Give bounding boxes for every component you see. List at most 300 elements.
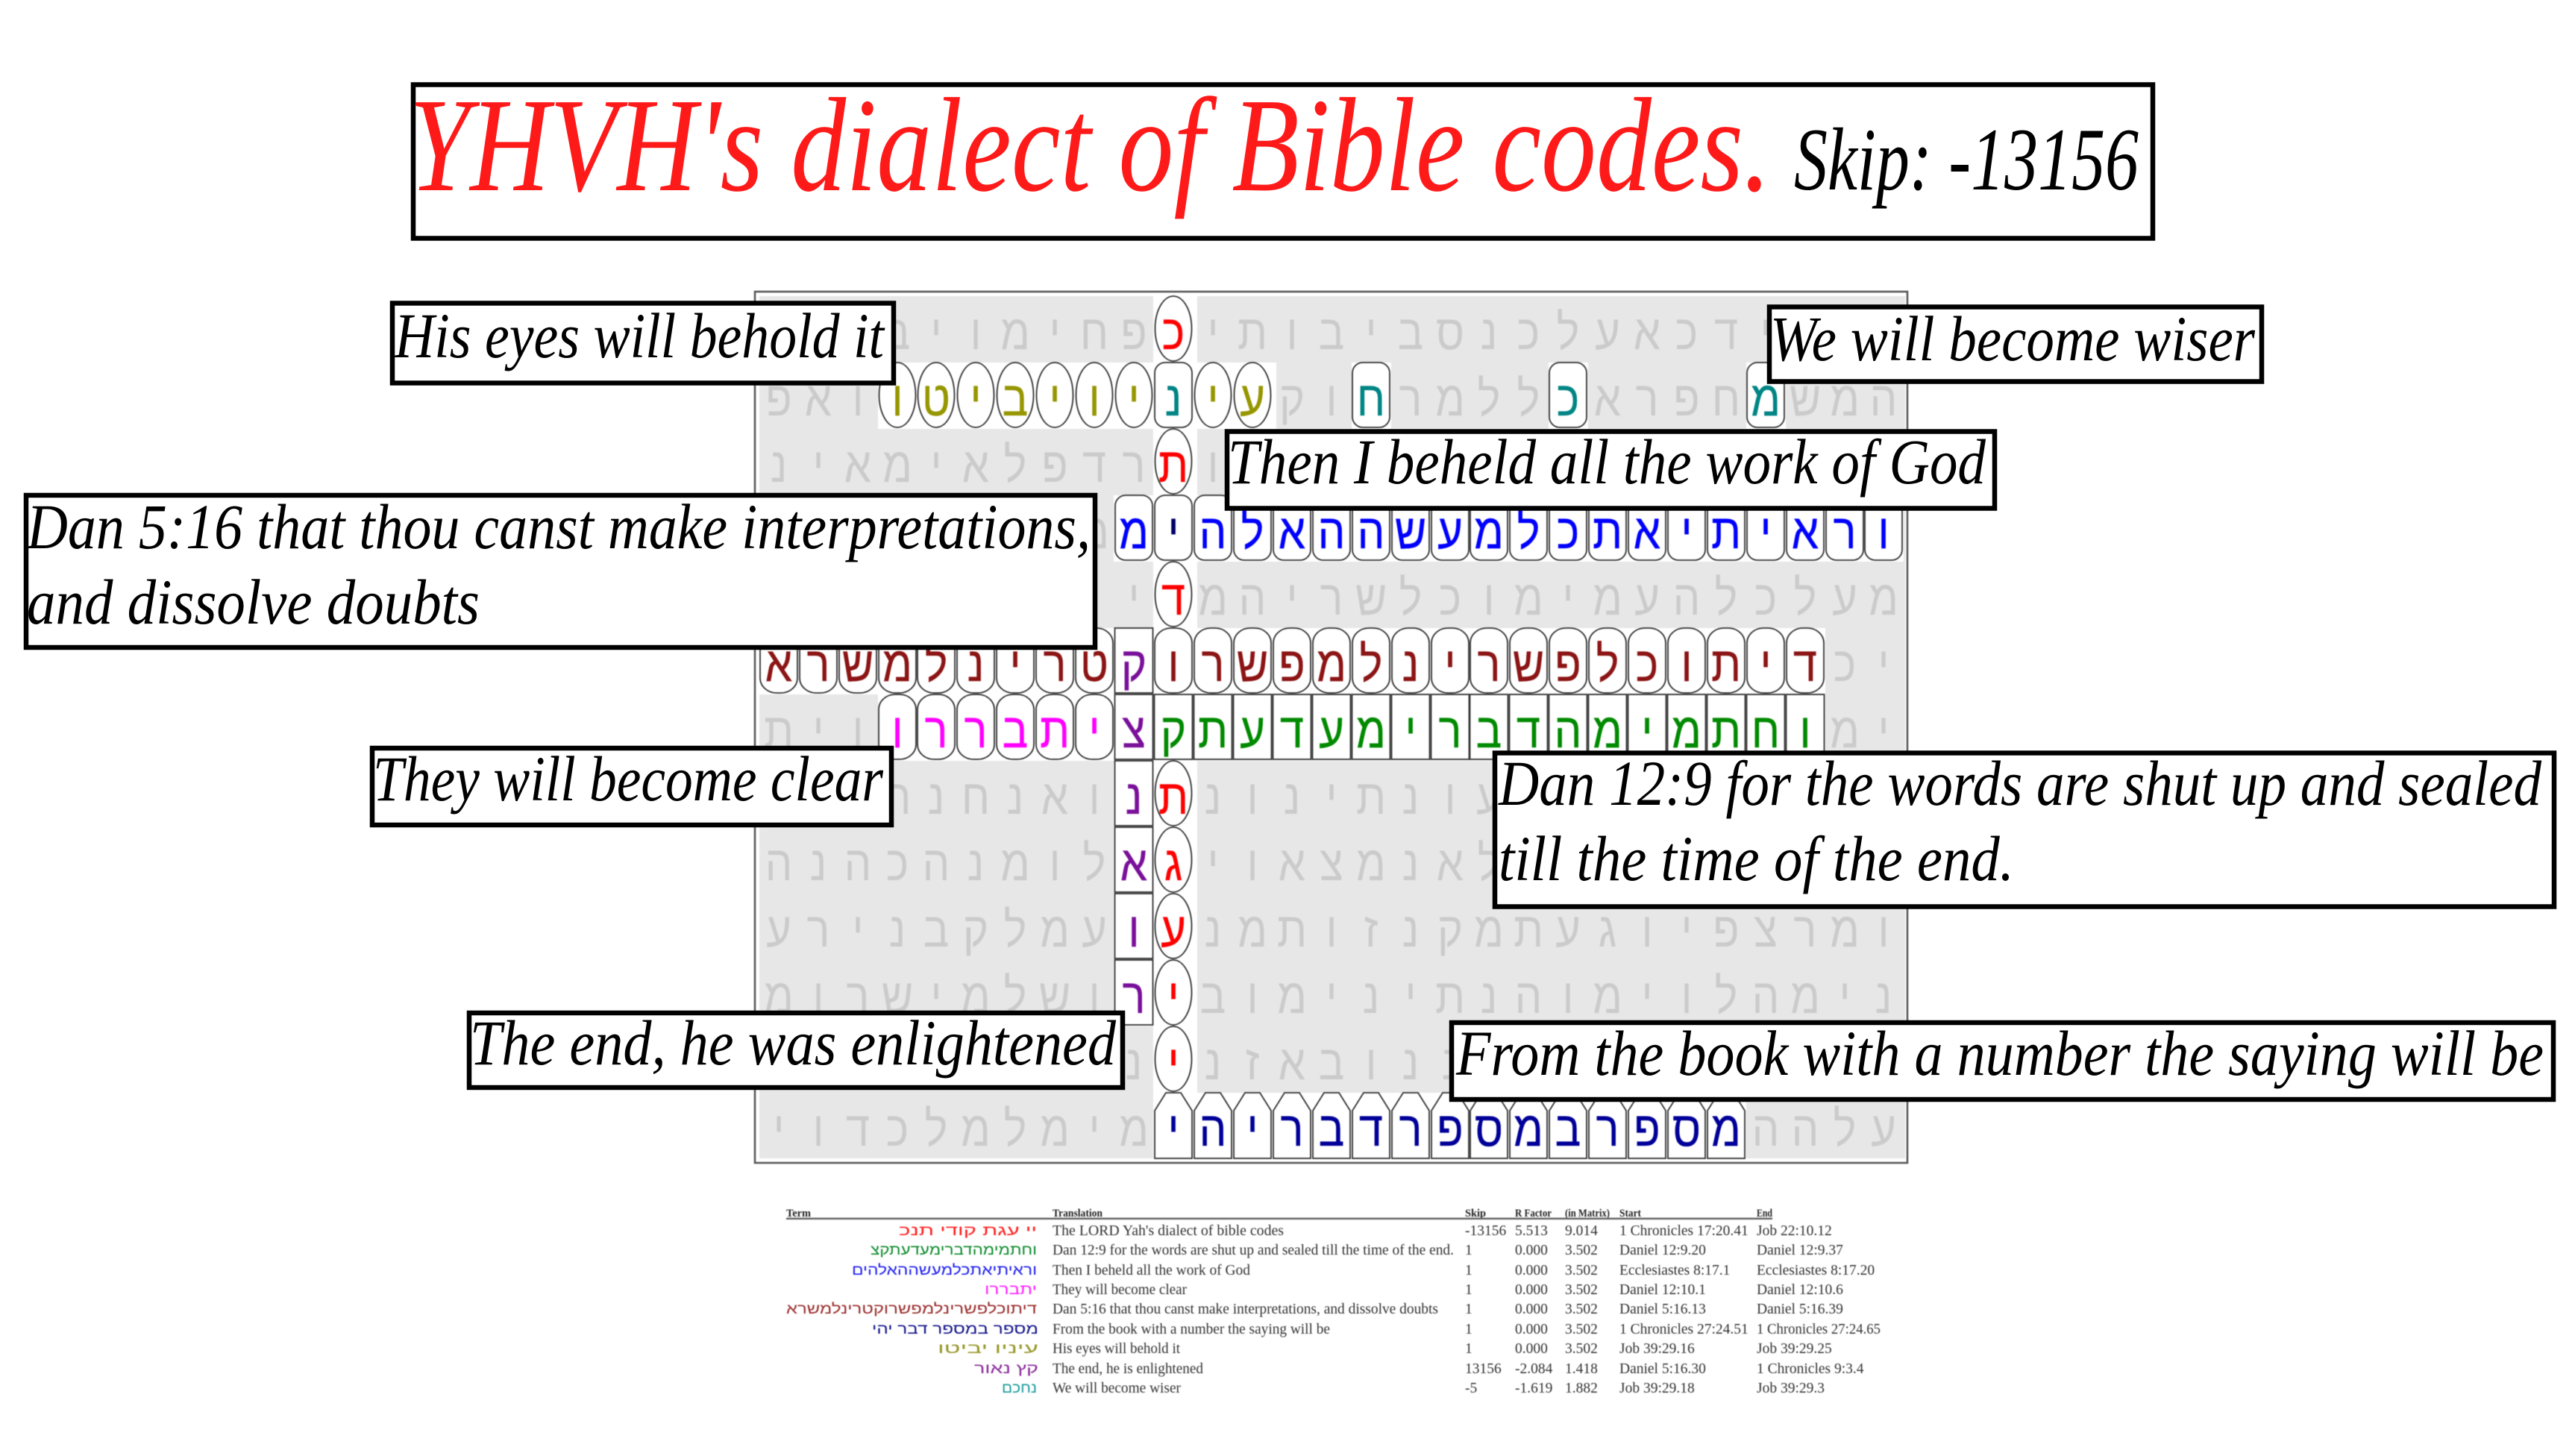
row 1 letters: כ [1517, 306, 1540, 360]
row 13 letters: ס [1475, 1102, 1503, 1157]
row 10 letters: י [852, 903, 864, 958]
row 12 letters: א [1279, 1036, 1305, 1091]
row 11 letters: נ [1363, 970, 1379, 1024]
row 7 letters: י [1405, 704, 1417, 759]
row 13 letters: ב [1319, 1102, 1344, 1157]
row 4 letters: מ [1474, 505, 1504, 559]
row 11 letters: ו [1088, 970, 1100, 1024]
table row 7: 0.000 [1515, 1341, 1548, 1357]
table row 7: Job 39:29.25 [1757, 1341, 1832, 1357]
row 11 letters [764, 970, 1892, 1024]
row 2 letters: נ [1165, 372, 1182, 427]
table row 4: Daniel 12:10.1 [1619, 1282, 1706, 1298]
row 9 letters: י [1207, 837, 1219, 891]
row 13 letters: ר [1399, 1102, 1422, 1157]
row 13 letters: מ [1514, 1102, 1543, 1157]
table row 5: Dan 5:16 that thou canst make interpretations, and dissolve doubts [1053, 1302, 1438, 1317]
row 10 letters: ע [1082, 903, 1107, 958]
table row 5: Daniel 5:16.13 [1619, 1302, 1706, 1317]
row 13 letters: י [1088, 1102, 1100, 1157]
row 4 letters: ת [1711, 505, 1741, 559]
row 8 letters: ע [1476, 771, 1502, 825]
row 13 letters: ל [925, 1102, 947, 1157]
row 11 letters: ל [1004, 970, 1026, 1024]
label: Dan 5:16: and dissolve doubts [27, 566, 480, 638]
row 6 letters: י [1444, 638, 1456, 692]
row 13 letters: פ [1634, 1102, 1660, 1157]
row 5 letters: י [1562, 571, 1574, 626]
row 6 letters: ר [1044, 638, 1066, 692]
row 11 letters: ו [1681, 970, 1693, 1024]
row 1 letters: ת [1238, 306, 1267, 360]
row 4 letters: ל [1517, 505, 1540, 559]
row 10 letters: נ [1205, 903, 1221, 958]
row 1 letters: י [930, 306, 942, 360]
row 11 letters: מ [1593, 970, 1622, 1024]
table row 2 [871, 1243, 1843, 1258]
table row 8: 1 Chronicles 9:3.4 [1757, 1361, 1864, 1377]
table row 9: We will become wiser [1053, 1381, 1181, 1396]
table row 8: 1.418 [1565, 1361, 1598, 1377]
row 10 letters: ו [1641, 903, 1653, 958]
row 9 letters: ו [1049, 837, 1061, 891]
row 1 letters: ב [1398, 306, 1423, 360]
table row 5: Daniel 5:16.39 [1757, 1302, 1843, 1317]
table row 3: Ecclesiastes 8:17.20 [1757, 1263, 1875, 1278]
table row 6: 1 Chronicles 27:24.65 [1757, 1322, 1881, 1337]
row 2 letters: פ [765, 372, 792, 427]
row 9 letters: ו [1246, 837, 1258, 891]
table row 1: The LORD Yah's dialect of bible codes [1053, 1223, 1284, 1239]
row 4 letters: ש [1395, 505, 1426, 559]
row 8 letters: א [1041, 771, 1068, 825]
row 11 letters: מ [1790, 970, 1820, 1024]
row 13 letters: ע [1871, 1102, 1896, 1157]
row 13 letters: מ [961, 1102, 991, 1157]
row 10 letters: ו [1128, 903, 1140, 958]
table row 1: 9.014 [1565, 1223, 1598, 1239]
row 1 letters: י [1207, 306, 1219, 360]
row 11 letters: ה [1752, 970, 1779, 1024]
row 4 letters: ע [1437, 505, 1463, 559]
row 4 letters: ת [1593, 505, 1622, 559]
row 9 letters: א [1279, 837, 1305, 891]
row 11 letters: י [930, 970, 942, 1024]
row 2 letters: י [970, 372, 982, 427]
table row 6: From the book with a number the saying will be [1053, 1322, 1330, 1337]
table row 2: Daniel 12:9.20 [1619, 1243, 1706, 1258]
row 13 letters: י [1167, 1102, 1179, 1157]
row 12 letters: נ [1442, 1036, 1458, 1091]
row 7 letters: ו [891, 704, 903, 759]
row 11 letters: ש [1039, 970, 1070, 1024]
table row 6: 1 Chronicles 27:24.51 [1619, 1322, 1748, 1337]
row 6 letters: י [1878, 638, 1889, 692]
row 5 letters: ל [1399, 571, 1422, 626]
table row 1: 1 Chronicles 17:20.41 [1619, 1223, 1748, 1239]
row 6 letters: ד [1793, 638, 1817, 692]
row 10 letters: צ [1754, 903, 1778, 958]
label: Then I beheld all the work of God: Then I beheld all the work of God [1228, 426, 1986, 498]
row 1 letters: פ [1120, 306, 1147, 360]
table header: Translation [1053, 1208, 1103, 1220]
row 10 letters: מ [1474, 903, 1504, 958]
row 2 letters: א [805, 372, 832, 427]
row 2 letters: ב [1003, 372, 1028, 427]
table row 1: יי עגת קודי תנכ [899, 1223, 1037, 1239]
row 3 letters: ו [1207, 439, 1219, 493]
label: Dan 5:16: Dan 5:16 that thou canst make interpretations, [26, 491, 1091, 562]
row 10 letters: ע [1161, 903, 1186, 958]
row 5 letters: מ [1514, 571, 1543, 626]
row 6 letters: ר [1202, 638, 1224, 692]
table row 1: Job 22:10.12 [1757, 1223, 1832, 1239]
row 6 letters: נ [1402, 638, 1419, 692]
table row 3: וראיתיאתכלמעשההאלהים [852, 1263, 1037, 1278]
table row 3: Ecclesiastes 8:17.1 [1619, 1263, 1730, 1278]
row 11 letters: מ [961, 970, 991, 1024]
row 5 letters: ד [1161, 571, 1185, 626]
row 13 letters: ה [1752, 1102, 1779, 1157]
row 13 letters: ד [1359, 1102, 1383, 1157]
row 4 letters: מ [1079, 505, 1109, 559]
row 3 letters: ד [1082, 439, 1106, 493]
row 7 letters: ק [1161, 704, 1186, 759]
row 5 letters: כ [1439, 571, 1461, 626]
row 12 letters: ב [1319, 1036, 1344, 1091]
row 6 letters: ל [1596, 638, 1619, 692]
row 13 letters: מ [1119, 1102, 1149, 1157]
row 5 letters: ש [1355, 571, 1387, 626]
row 5 letters: י [1128, 571, 1140, 626]
table row 8: קץ נאור [974, 1361, 1038, 1377]
row 7 letters: ו [852, 704, 864, 759]
row 6 letters: פ [1555, 638, 1581, 692]
row 2 letters: מ [1830, 372, 1860, 427]
row 1 letters: א [1634, 306, 1660, 360]
row 3 letters: נ [771, 439, 787, 493]
table row 6: 0.000 [1515, 1322, 1548, 1337]
row 9 letters: כ [886, 837, 909, 891]
table row 3: 1 [1465, 1263, 1472, 1278]
row 9 letters: נ [967, 837, 984, 891]
row 2 letters: ו [891, 372, 903, 427]
row 2 letters: ט [922, 372, 950, 427]
row 10 letters: ע [766, 903, 791, 958]
row 10 letters: נ [1402, 903, 1419, 958]
row 2 letters: ר [1636, 372, 1658, 427]
table row 9: Job 39:29.3 [1757, 1381, 1825, 1396]
matrix letters [764, 306, 1898, 1157]
row 8 letters: נ [1205, 771, 1221, 825]
row 6 letters: ר [1478, 638, 1500, 692]
row 8 letters: נ [1284, 771, 1300, 825]
table row 7: עיניו יביטו [938, 1341, 1038, 1357]
row 13 letters: מ [1040, 1102, 1070, 1157]
table row 9: -1.619 [1515, 1381, 1552, 1396]
table row 7: His eyes will behold it [1053, 1341, 1181, 1357]
row 10 letters: ר [807, 903, 829, 958]
row 5 letters: ר [1320, 571, 1343, 626]
row 11 letters: י [1326, 970, 1337, 1024]
row 12 letters: י [1167, 1036, 1179, 1091]
row 1 letters: י [1365, 306, 1377, 360]
row 10 letters: נ [889, 903, 906, 958]
row 2 letters: ק [1279, 372, 1305, 427]
table row 6 [872, 1322, 1881, 1337]
row 11 letters: י [1641, 970, 1653, 1024]
row 10 letters: י [1681, 903, 1693, 958]
row 2 letters: ע [1240, 372, 1265, 427]
table row 8: -2.084 [1515, 1361, 1553, 1377]
row 11 letters: י [1167, 970, 1179, 1024]
row 11 letters: ת [1435, 970, 1465, 1024]
table row 2: 1 [1465, 1243, 1472, 1258]
row 4 letters: י [1760, 505, 1772, 559]
table row 8: 13156 [1465, 1361, 1502, 1377]
row 11 letters: ל [1715, 970, 1737, 1024]
row 5 letters [1128, 571, 1898, 626]
row 6 letters: ש [842, 638, 874, 692]
row 2 letters: פ [1673, 372, 1700, 427]
row 11 letters: נ [1875, 970, 1892, 1024]
row 10 letters: ק [963, 903, 988, 958]
row 4 letters: ר [1834, 505, 1856, 559]
row 5 letters: מ [1198, 571, 1228, 626]
row 7 letters: י [812, 704, 824, 759]
row 11 letters: ש [882, 970, 913, 1024]
title: Skip: -13156 [1794, 110, 2139, 209]
row 3 letters: ל [1004, 439, 1026, 493]
row 1 letters: ב [885, 306, 910, 360]
row 7 letters: מ [1356, 704, 1386, 759]
row 9 letters: ג [1164, 837, 1182, 891]
row 10 letters: ז [1364, 903, 1378, 958]
row 7 letters: ו [1799, 704, 1811, 759]
label: We will become wiser: We will become wiser [1770, 303, 2255, 374]
row 13 letters: מ [1711, 1102, 1741, 1157]
row 7 letters: צ [1122, 704, 1146, 759]
table row 2: Dan 12:9 for the words are shut up and sealed till the time of the end. [1053, 1243, 1454, 1258]
row 9 letters: צ [1320, 837, 1343, 891]
table header [786, 1208, 1772, 1220]
row 7 letters: ר [925, 704, 947, 759]
row 13 letters [773, 1102, 1896, 1157]
row 3 letters: ר [1123, 439, 1145, 493]
row 1 letters: כ [1162, 306, 1185, 360]
label: Dan 12:9: till the time of the end. [1499, 823, 2014, 894]
row 7 letters: י [1641, 704, 1653, 759]
table row 1 [899, 1223, 1832, 1239]
row 11 letters: י [1839, 970, 1851, 1024]
row 2 letters: ח [1712, 372, 1740, 427]
table row 5 [786, 1302, 1843, 1317]
table row 9: 1.882 [1565, 1381, 1598, 1396]
row 4 letters: כ [1557, 505, 1579, 559]
table row 5: דיתוכלפשרינלמפשרוקטרינלמשרא [786, 1302, 1038, 1317]
row 13 letters: ד [846, 1102, 870, 1157]
row 6 letters: פ [1279, 638, 1305, 692]
table row 2: Daniel 12:9.37 [1757, 1243, 1843, 1258]
code term outlines [760, 296, 1902, 1158]
row 13 letters: פ [1437, 1102, 1464, 1157]
table row 9: -5 [1465, 1381, 1477, 1396]
row 10 letters: ת [1514, 903, 1543, 958]
table header: Start [1619, 1208, 1641, 1220]
row 8 letters: ו [1088, 771, 1100, 825]
row 13 letters: ל [1834, 1102, 1856, 1157]
row 4 letters: ה [1318, 505, 1345, 559]
row 13 letters: ה [1199, 1102, 1226, 1157]
row 10 letters: מ [1040, 903, 1070, 958]
row 9 letters: ה [844, 837, 871, 891]
row 8 letters: נ [1402, 771, 1419, 825]
row 6 letters: ש [1513, 638, 1544, 692]
row 1 letters: נ [1481, 306, 1497, 360]
label: His eyes will behold it: His eyes will behold it [394, 300, 885, 371]
row 6 letters: כ [1636, 638, 1658, 692]
row 9 letters: א [1437, 837, 1464, 891]
row 10 letters: ר [1794, 903, 1816, 958]
table row 9: Job 39:29.18 [1619, 1381, 1695, 1396]
row 4 letters: י [1167, 505, 1179, 559]
row 2 letters: ח [1357, 372, 1385, 427]
row 3 letters: פ [1041, 439, 1068, 493]
row 9 letters: נ [1402, 837, 1419, 891]
row 1 letters: ס [1436, 306, 1464, 360]
row 13 letters: ס [1672, 1102, 1701, 1157]
row 10 letters: פ [1713, 903, 1740, 958]
row 8 letters: ת [1158, 771, 1188, 825]
row 1 letters: מ [1000, 306, 1030, 360]
row 6 letters: כ [1834, 638, 1856, 692]
table row 5: 1 [1465, 1302, 1472, 1317]
row 8 letters: ו [1246, 771, 1258, 825]
table row 2: וחתמימהדברימעדעתקצ [871, 1243, 1037, 1258]
row 7 letters: ע [1240, 704, 1265, 759]
table row 4: Daniel 12:10.6 [1757, 1282, 1843, 1298]
row 12 letters: נ [1402, 1036, 1419, 1091]
row 1 letters: ו [1286, 306, 1298, 360]
table row 5: 3.502 [1565, 1302, 1598, 1317]
row 12 letters: ו [1365, 1036, 1377, 1091]
row 13 letters: ר [1281, 1102, 1303, 1157]
row 7 letters: ב [1003, 704, 1028, 759]
row 7 letters: י [1878, 704, 1889, 759]
row 5 letters: מ [1593, 571, 1622, 626]
row 5 letters: ו [1483, 571, 1495, 626]
row 1 letters: י [1049, 306, 1061, 360]
row 10 letters: ב [923, 903, 949, 958]
row 10 letters: מ [1830, 903, 1860, 958]
row 10 letters: ת [1277, 903, 1307, 958]
row 9 letters: מ [1000, 837, 1030, 891]
row 1 letters: ב [1319, 306, 1344, 360]
row 1 letters: כ [1675, 306, 1698, 360]
row 4 letters: י [1681, 505, 1693, 559]
row 9 letters: א [1120, 837, 1147, 891]
row 9 letters: נ [810, 837, 827, 891]
row 1 letters [885, 306, 1772, 360]
row 9 letters [765, 837, 1500, 891]
row 6 letters: ר [807, 638, 829, 692]
row 13 letters: י [1246, 1102, 1258, 1157]
row 9 letters: ל [1478, 837, 1500, 891]
title: YHVH's dialect of Bible codes. [409, 71, 1771, 219]
row 4 letters: א [1634, 505, 1660, 559]
row 3 letters: י [812, 439, 824, 493]
label: Dan 12:9 [1495, 747, 2554, 907]
row 7 letters: ד [1517, 704, 1540, 759]
row 11 letters: ו [1246, 970, 1258, 1024]
row 3 letters: א [962, 439, 989, 493]
table header: (in Matrix) [1565, 1208, 1610, 1220]
row 13 letters: ו [812, 1102, 824, 1157]
row 8 letters: נ [1007, 771, 1023, 825]
row 2 letters: ו [1088, 372, 1100, 427]
row 9 letters: ה [923, 837, 950, 891]
row 7 letters: מ [1593, 704, 1622, 759]
row 6 letters: ק [1121, 638, 1147, 692]
row 11 letters: ה [1515, 970, 1542, 1024]
table row 6: מספר במספר דבר יהי [872, 1322, 1038, 1337]
row 9 letters: ה [765, 837, 792, 891]
table row 3: 0.000 [1515, 1263, 1548, 1278]
row 7 letters: ע [1319, 704, 1344, 759]
row 10 letters: ו [1878, 903, 1889, 958]
row 4 letters: א [1279, 505, 1305, 559]
table row 4: יתבררו [985, 1282, 1037, 1298]
label: The end, he was enlightened: The end, he was enlightened [470, 1007, 1117, 1079]
table header: End [1757, 1208, 1772, 1220]
row 4 letters: ל [1241, 505, 1264, 559]
row 1 letters: י [1760, 306, 1772, 360]
row 6 letters: ט [1080, 638, 1108, 692]
row 12 letters: נ [1205, 1036, 1221, 1091]
row 1 letters: ע [1595, 306, 1620, 360]
row 10 letters [766, 903, 1889, 958]
row 5 letters: כ [1754, 571, 1777, 626]
row 4 letters: א [1792, 505, 1819, 559]
table row 4: 1 [1465, 1282, 1472, 1298]
row 6 letters: מ [882, 638, 912, 692]
row 11 letters: ו [1562, 970, 1574, 1024]
row 7 letters: ר [965, 704, 987, 759]
row 6 letters: נ [967, 638, 984, 692]
row 5 letters: מ [1869, 571, 1898, 626]
row 6 letters: ל [1360, 638, 1382, 692]
row 3 letters: ת [1158, 439, 1188, 493]
row 2 letters: י [1207, 372, 1219, 427]
label: They will become clear: They will become clear [373, 743, 883, 815]
row 1 letters: ח [1080, 306, 1108, 360]
row 10 letters: ק [1437, 903, 1463, 958]
row 2 letters: ר [1399, 372, 1422, 427]
row 2 letters: י [1049, 372, 1061, 427]
row 2 letters: כ [1557, 372, 1579, 427]
row 13 letters: ל [1004, 1102, 1026, 1157]
row 5 letters: ע [1634, 571, 1660, 626]
table row 7: 1 [1465, 1341, 1472, 1357]
row 10 letters: ע [1555, 903, 1581, 958]
row 12 letters [1126, 1036, 1458, 1091]
row 11 letters: ו [812, 970, 824, 1024]
row 2 letters: ל [1478, 372, 1500, 427]
row 1 letters: ל [1557, 306, 1579, 360]
row 8 letters: נ [1126, 771, 1142, 825]
table row 8 [974, 1361, 1864, 1377]
row 5 letters: ל [1794, 571, 1816, 626]
